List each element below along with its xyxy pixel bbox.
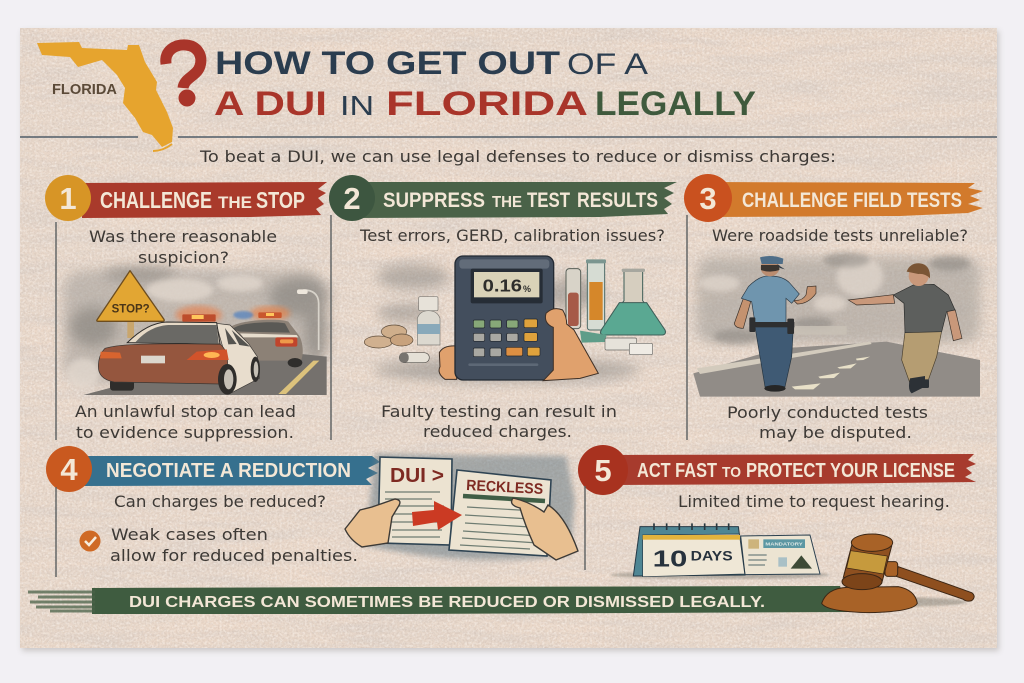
takeaway text 1: An unlawful stop can lead <box>75 402 296 421</box>
takeaway text 4: allow for reduced penalties. <box>110 546 358 565</box>
calendar: DAYS <box>691 548 733 564</box>
calendar: 10 <box>653 546 687 572</box>
panel: 4 negotiate a reduction <box>46 446 578 577</box>
panel: 3 challenge field tests <box>684 174 983 442</box>
license card: MANDATORY <box>765 541 803 546</box>
document: DUI: DUI > <box>390 465 444 487</box>
title: IN <box>340 90 374 121</box>
pills <box>364 325 429 363</box>
left fingers <box>439 346 457 379</box>
icon: check mark <box>80 530 100 552</box>
bottle <box>417 297 440 345</box>
hand <box>543 309 598 381</box>
banner 4: 4 <box>60 452 78 487</box>
takeaway text 2: Faulty testing can result in <box>381 402 617 421</box>
gavel base <box>822 587 917 613</box>
question text 4: Can charges be reduced? <box>114 492 326 511</box>
banner 1: THE <box>218 193 252 212</box>
takeaway text 1 <box>75 402 296 442</box>
stop sign <box>97 271 164 338</box>
illustration: calendar and license <box>610 523 830 579</box>
flask <box>601 269 665 335</box>
banner 3: CHALLENGE <box>742 189 848 212</box>
banner 1: 1 <box>59 181 77 216</box>
footer banner: DUI CHARGES CAN SOMETIMES BE REDUCED OR DISMISSED LEGALLY. <box>129 594 765 611</box>
illustration: breathalyzer and lab items <box>364 256 665 383</box>
breathalyzer device: 0.16 <box>483 275 522 295</box>
takeaway text 1: to evidence suppression. <box>76 423 294 442</box>
document: RECKLESS: RECKLESS <box>466 477 544 498</box>
banner 2: TEST <box>527 189 570 212</box>
icon: gavel <box>822 534 974 613</box>
breathalyzer device: % <box>523 284 531 294</box>
title <box>214 45 756 123</box>
question text 1 <box>89 227 277 267</box>
takeaway text 3 <box>727 403 928 442</box>
banner 5: PROTECT YOUR LICENSE <box>746 460 955 482</box>
icon: Florida map <box>37 42 173 151</box>
banner 1: STOP <box>256 187 305 213</box>
body text 5: Limited time to request hearing. <box>678 492 950 511</box>
banner 5: ACT FAST <box>637 460 717 482</box>
question text 1: Was there reasonable <box>89 227 277 246</box>
illustration: documents and hands <box>345 454 578 560</box>
banner 4 <box>46 446 380 492</box>
calendar <box>633 523 745 577</box>
banner 3: 3 <box>699 181 717 216</box>
question text 1: suspicion? <box>138 248 229 267</box>
title: OF A <box>567 48 648 81</box>
test tubes <box>566 259 606 330</box>
left hand <box>345 499 400 547</box>
banner 5: 5 <box>594 453 612 488</box>
banner 1: CHALLENGE <box>100 187 212 213</box>
title: LEGALLY <box>595 85 756 123</box>
test subject <box>848 263 962 393</box>
takeaway text 3: may be disputed. <box>759 423 912 442</box>
header <box>37 42 756 151</box>
illustration: field sobriety test <box>693 253 980 397</box>
icon: Florida map: FLORIDA <box>52 82 118 98</box>
takeaway text 2 <box>381 402 617 441</box>
police officer <box>734 256 816 392</box>
takeaway text 3: Poorly conducted tests <box>727 403 928 422</box>
gavel handle <box>895 567 974 601</box>
title: A DUI <box>214 85 327 123</box>
banner 3 <box>684 174 983 222</box>
illustration: police stop <box>63 266 330 395</box>
question text 2: Test errors, GERD, calibration issues? <box>359 226 665 245</box>
gavel head <box>843 542 892 583</box>
banner 5: TO <box>722 464 741 481</box>
banner 2: RESULTS <box>577 189 658 212</box>
takeaway text 4 <box>110 525 358 565</box>
keypad <box>473 319 540 357</box>
license card <box>741 535 820 575</box>
document: RECKLESS <box>449 470 551 556</box>
icon: question mark <box>166 45 201 106</box>
banner 2: 2 <box>343 181 361 216</box>
panel: 5 act fast <box>28 445 976 614</box>
banner 3: TESTS <box>907 189 962 212</box>
banner 2 <box>329 175 677 221</box>
front police car <box>98 306 260 395</box>
title: FLORIDA <box>386 85 588 123</box>
banner 3: FIELD <box>853 189 902 212</box>
takeaway text 2: reduced charges. <box>423 422 572 441</box>
panel: 2 suppress the test results <box>329 175 677 441</box>
footer banner <box>28 586 850 614</box>
panel: 1 challenge the stop <box>45 175 330 442</box>
back police car <box>231 306 303 367</box>
intro text: To beat a DUI, we can use legal defenses to reduce or dismiss charges: <box>199 147 836 166</box>
banner 2: SUPPRESS <box>383 189 485 212</box>
document: DUI <box>378 457 452 545</box>
takeaway text 4: Weak cases often <box>111 525 268 544</box>
banner 1 <box>45 175 327 221</box>
arrow <box>412 501 462 530</box>
banner 4: NEGOTIATE A REDUCTION <box>106 460 351 482</box>
title: HOW TO GET OUT <box>215 45 561 81</box>
breathalyzer device <box>455 256 554 380</box>
right hand <box>512 498 578 560</box>
question text 3: Were roadside tests unreliable? <box>712 226 968 245</box>
banner 2: THE <box>492 194 522 211</box>
stop sign: STOP? <box>112 301 150 315</box>
tablets <box>580 331 653 355</box>
banner 5 <box>578 445 976 495</box>
